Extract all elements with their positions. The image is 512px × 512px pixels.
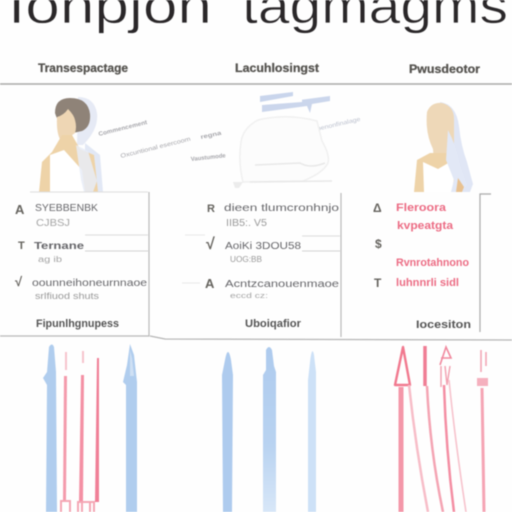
panel: right list: Iocesiton — [416, 319, 471, 331]
arrows: centre group — [222, 347, 316, 512]
list text: SYEBBENBK — [35, 203, 98, 214]
list text: Ternane — [34, 241, 85, 252]
column headings — [38, 61, 480, 76]
arrows: left group — [43, 344, 137, 512]
icon: item markers — [15, 202, 25, 289]
list text: UOG:BB — [230, 255, 262, 264]
callouts left: Commencement — [98, 120, 148, 138]
title — [8, 0, 508, 34]
list text — [224, 203, 340, 330]
panel: left list — [0, 192, 149, 336]
list text: luhnnrli sidl — [396, 277, 459, 289]
icon: item markers: Δ — [373, 201, 382, 215]
list text — [396, 202, 469, 289]
icon: item markers: A — [15, 202, 25, 217]
icon: item markers — [205, 203, 215, 291]
panel: centre list — [150, 193, 512, 340]
icon: item markers: T — [374, 276, 382, 290]
callouts left: Oxcuntional esercoom — [120, 137, 191, 160]
list text: AoiKi 3DOU58 — [225, 241, 302, 252]
column headings: Lacuhlosingst — [235, 61, 319, 75]
list text: kvpeatgta — [397, 220, 454, 232]
list text: dieen tlumcronhnjo — [224, 203, 340, 214]
callouts left: regna — [200, 131, 223, 141]
list text: Uboiqafior — [245, 318, 302, 330]
icon: item markers: T — [18, 240, 25, 252]
icon: item markers — [373, 201, 382, 290]
list text: srlfiuod shuts — [35, 291, 100, 301]
list text: Fipunlhgnupess — [36, 318, 119, 330]
list text: Acntzcanouenmaoe — [225, 279, 340, 290]
list text: IIB5:. V5 — [226, 218, 267, 229]
illustration: centre garment — [233, 92, 362, 188]
callouts left: Vaustumode — [191, 153, 227, 163]
illustration: centre garment: Openonfinalage — [311, 117, 362, 134]
list text: Rvnrotahnono — [396, 257, 469, 269]
icon: item markers: A — [205, 276, 215, 291]
illustration: woman left — [39, 97, 103, 192]
icon: item markers: √ — [15, 274, 23, 289]
callouts left — [98, 120, 227, 163]
column headings: Transespactage — [38, 61, 128, 75]
list text: CJBSJ — [36, 218, 70, 229]
illustration: woman right — [414, 102, 473, 192]
icon: item markers: R — [207, 203, 215, 215]
icon: item markers: $ — [375, 237, 382, 251]
panel: right list — [373, 194, 491, 332]
list text: oounneihoneurnnaoe — [32, 278, 148, 289]
list text: eccd cz: — [230, 293, 268, 300]
list text: Fleroora — [396, 202, 447, 214]
list text — [32, 203, 148, 330]
list text: ag ib — [38, 255, 63, 264]
arrows: right group — [395, 346, 488, 512]
column headings: Pwusdeotor — [409, 62, 480, 76]
icon: item markers: √ — [206, 236, 215, 253]
